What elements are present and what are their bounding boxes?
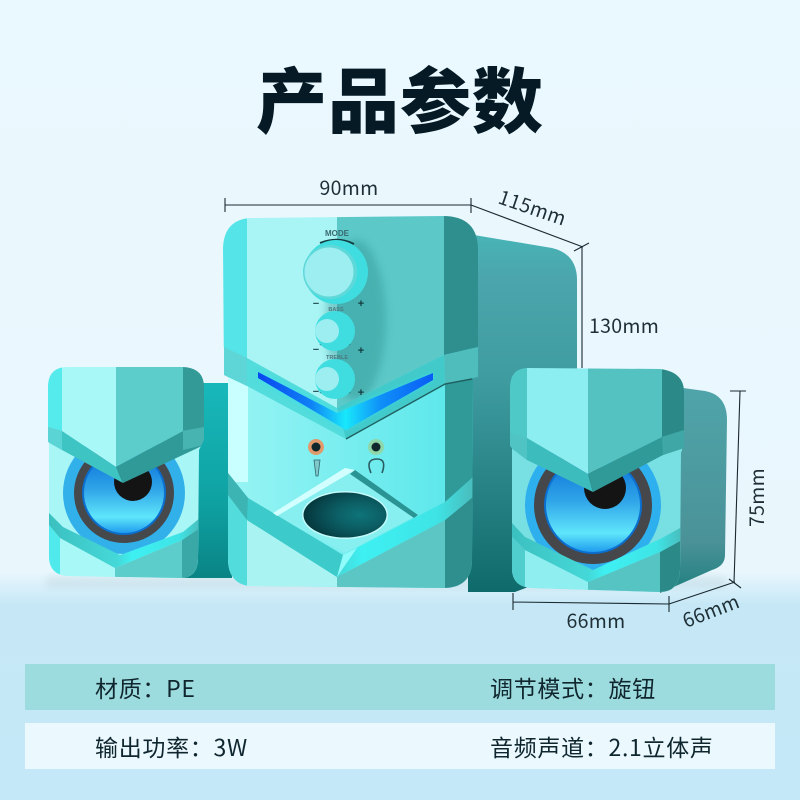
dimension label: 66mm width: 66mm [567, 605, 625, 634]
knob: bass [313, 307, 364, 357]
knob: mode: + [358, 298, 364, 310]
spec row 1 [25, 664, 775, 710]
knob shadow [326, 240, 386, 400]
knob: treble: − [313, 386, 319, 398]
knob: bass: BASS [328, 307, 344, 313]
knob: treble: + [358, 387, 364, 399]
knob: treble: TREBLE [326, 355, 348, 361]
center speaker upper faces [223, 216, 478, 408]
audio jacks [308, 439, 384, 476]
right speaker lower faces [512, 523, 682, 595]
left speaker upper chevron [48, 427, 204, 483]
dimension lines [225, 198, 746, 612]
knob: treble [313, 355, 364, 399]
dimension label: 90mm: 90mm [320, 172, 378, 201]
spec: output power: 输出功率：3W [95, 729, 248, 763]
spec: material: 材质：PE [95, 670, 196, 704]
left speaker [48, 367, 232, 580]
left speaker lower body [49, 430, 201, 580]
bass port [273, 468, 418, 553]
shadow under speakers [46, 576, 726, 588]
right speaker upper chevron [510, 430, 684, 492]
knob: bass: − [313, 344, 319, 356]
knob: mode [303, 229, 368, 310]
center speaker front shell [223, 216, 478, 592]
dimension label: 66mm depth: 66mm [678, 585, 743, 634]
blue LED strip [258, 372, 433, 430]
center speaker back panel [468, 234, 577, 592]
spec row 2 [25, 723, 775, 769]
knob: mode: − [313, 298, 319, 310]
chevron band [224, 347, 478, 439]
knob: mode: MODE [325, 229, 350, 238]
center speaker [223, 216, 577, 592]
left speaker upper faces [48, 367, 205, 467]
spec: audio channel: 音频声道：2.1立体声 [490, 729, 714, 763]
right speaker upper faces [510, 368, 685, 474]
right speaker [510, 368, 727, 595]
spec: adjust mode: 调节模式：旋钮 [490, 670, 656, 704]
dimension label: 130mm: 130mm [589, 310, 659, 339]
right speaker side panel [660, 387, 727, 593]
knob: bass: + [358, 345, 364, 357]
left speaker driver [63, 432, 185, 554]
right speaker front [510, 368, 685, 595]
center speaker lower front [228, 340, 473, 592]
dimension label: 75mm: 75mm [741, 468, 770, 527]
title: 产品参数 [256, 46, 544, 148]
right speaker driver [525, 451, 661, 570]
left speaker lower faces [49, 513, 201, 580]
right speaker lower body [512, 430, 682, 595]
left speaker front [48, 367, 205, 580]
left speaker side panel [182, 383, 232, 578]
dimension label: 115mm: 115mm [495, 181, 571, 231]
